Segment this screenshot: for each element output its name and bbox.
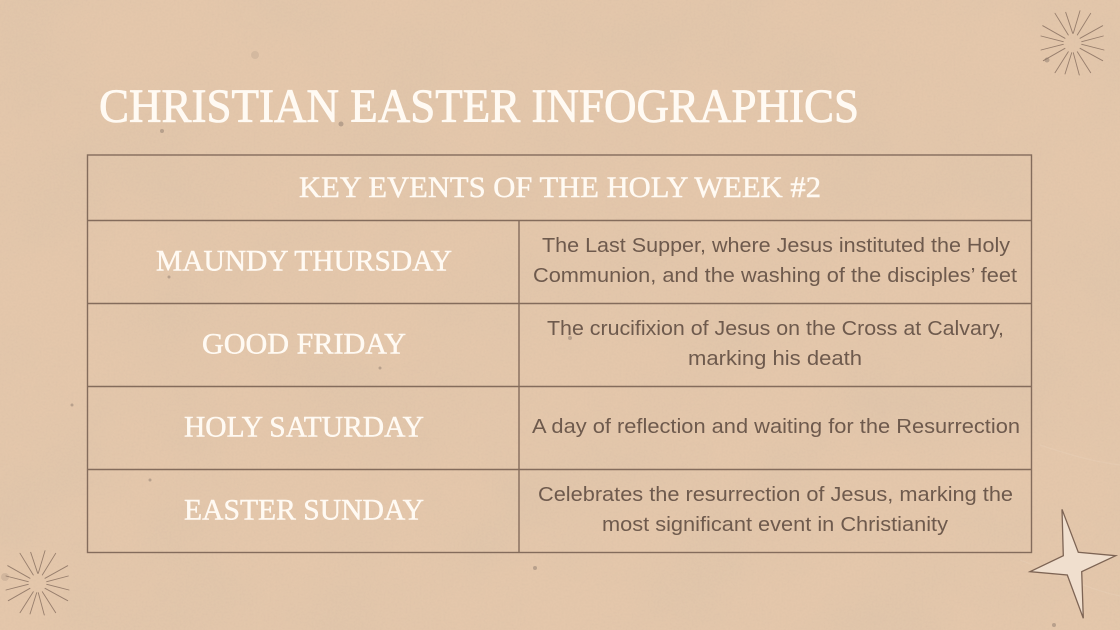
icon: four-point star	[1030, 509, 1116, 618]
row 2: Good Friday	[202, 318, 1004, 370]
row 1: Maundy Thursday: MAUNDY THURSDAY	[156, 244, 452, 278]
row 4: Easter Sunday: Celebrates the resurrection of Jesus, marking the	[538, 484, 1013, 506]
row 1: Maundy Thursday: The Last Supper, where Jesus instituted the Holy	[542, 235, 1010, 257]
table heading: KEY EVENTS OF THE HOLY WEEK #2	[299, 171, 821, 204]
table: key events	[88, 155, 1032, 552]
row 4: Easter Sunday: most significant event in Christianity	[602, 514, 948, 536]
row 2: Good Friday: GOOD FRIDAY	[202, 328, 406, 360]
icon: bottom-left sparkle	[6, 551, 69, 615]
row 3: Holy Saturday: HOLY SATURDAY	[184, 410, 424, 444]
table grid	[88, 155, 1032, 552]
title: CHRISTIAN EASTER INFOGRAPHICS	[99, 80, 859, 133]
icon: top-right sparkle	[1041, 11, 1104, 75]
row 2: Good Friday: marking his death	[688, 348, 862, 370]
row 2: Good Friday: The crucifixion of Jesus on the Cross at Calvary,	[547, 318, 1004, 340]
row 4: Easter Sunday: EASTER SUNDAY	[184, 494, 424, 526]
row 4: Easter Sunday	[184, 484, 1013, 536]
row 3: Holy Saturday	[184, 410, 1020, 444]
row 1: Maundy Thursday: Communion, and the washing of the disciples’ feet	[533, 265, 1017, 287]
row 1: Maundy Thursday	[156, 235, 1017, 287]
row 3: Holy Saturday: A day of reflection and waiting for the Resurrection	[532, 416, 1020, 438]
